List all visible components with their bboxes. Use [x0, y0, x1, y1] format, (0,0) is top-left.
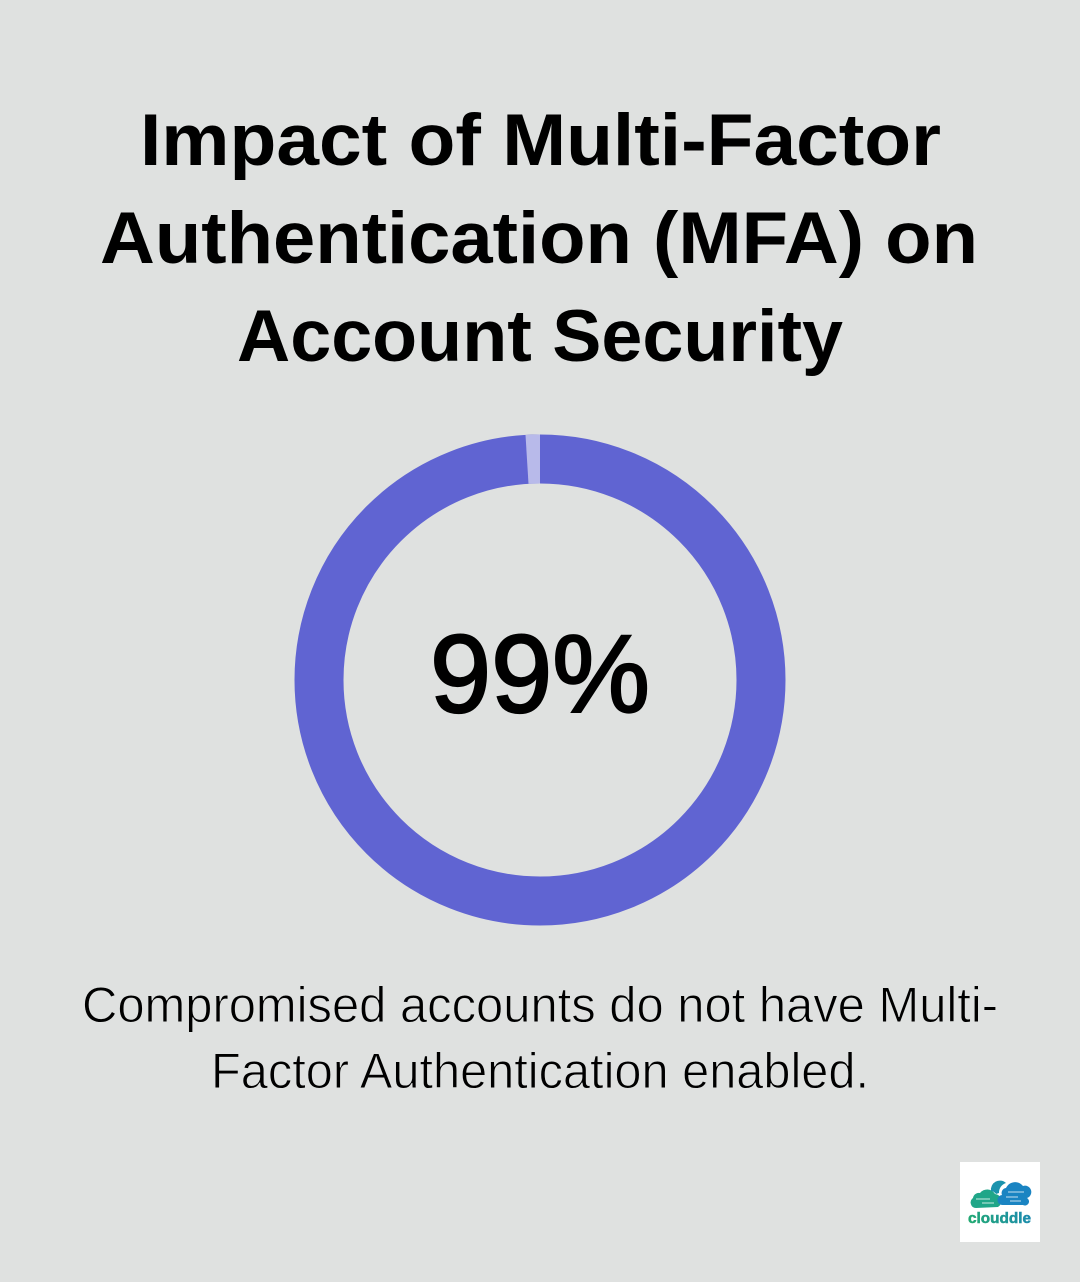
donut slice: remaining 1% [526, 434, 540, 484]
title: Account Security [237, 296, 843, 377]
donut chart: 99% [319, 434, 761, 901]
logo: clouddle [960, 1162, 1040, 1242]
title [100, 100, 978, 377]
caption [82, 977, 998, 1099]
icon: clouds [971, 1181, 1031, 1208]
logo wordmark: clouddle [968, 1211, 1031, 1227]
title: Authentication (MFA) on [100, 198, 978, 279]
caption: Factor Authentication enabled. [211, 1043, 869, 1099]
title: Impact of Multi-Factor [140, 100, 941, 181]
caption: Compromised accounts do not have Multi- [82, 977, 998, 1033]
center value: 99% [430, 613, 650, 736]
